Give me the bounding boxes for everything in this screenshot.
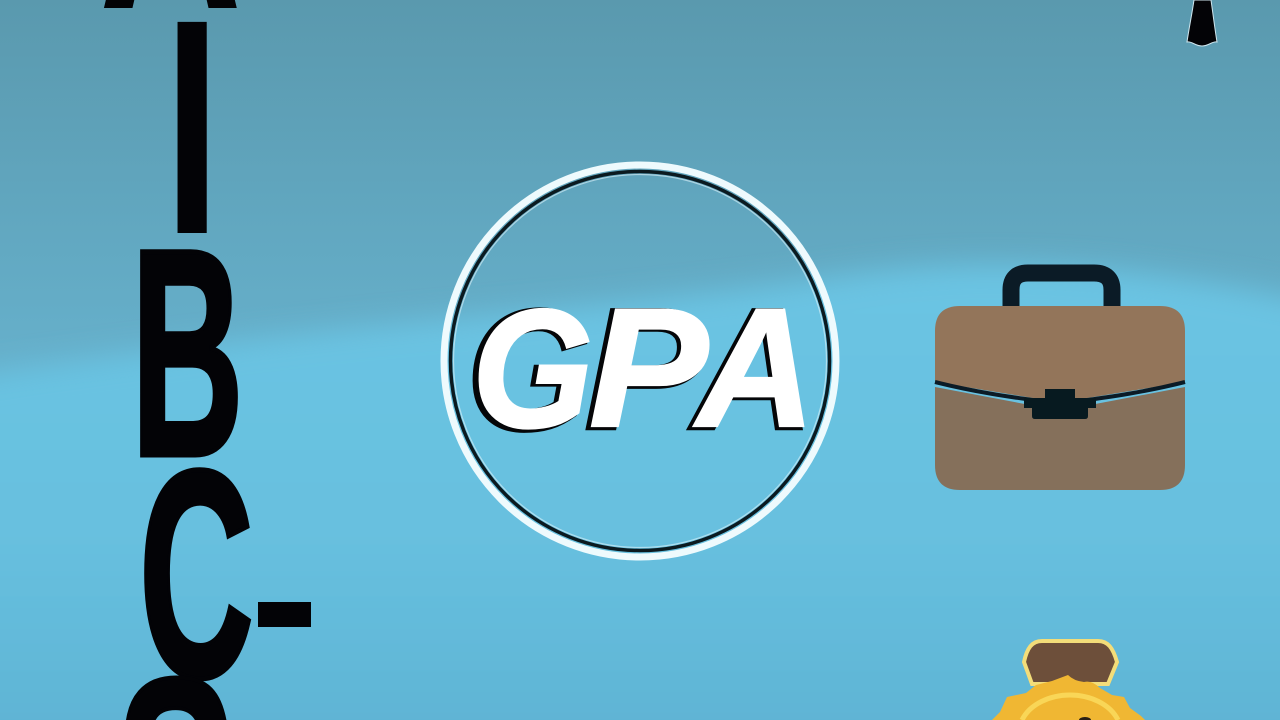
GPA badge <box>444 165 836 557</box>
icon: medal (cropped at bottom) <box>992 641 1145 720</box>
medal ribbon loop <box>1024 641 1117 684</box>
letter G shadow: G <box>467 274 590 465</box>
medal centre mark <box>1079 717 1091 720</box>
icon: graduation tassel <box>1187 0 1217 46</box>
medal inner ring <box>1022 695 1118 720</box>
letter grade column <box>99 0 311 720</box>
badge outer white ring <box>444 165 836 557</box>
briefcase handle <box>1011 273 1112 308</box>
letter A shadow: A <box>689 273 812 465</box>
briefcase seam <box>935 382 1185 401</box>
briefcase lower body <box>935 387 1185 490</box>
grade letter C with minus <box>139 409 311 720</box>
medal seal <box>992 675 1145 720</box>
grade letter B: B <box>131 189 244 519</box>
icon: briefcase <box>935 273 1185 490</box>
letter A: A <box>693 273 815 463</box>
letter G: G <box>472 275 593 463</box>
briefcase upper body <box>935 306 1185 400</box>
badge inner dark ring <box>450 172 830 550</box>
letter P shadow: P <box>585 274 706 465</box>
briefcase clasp <box>1024 389 1096 419</box>
letter P: P <box>589 273 709 462</box>
GPA heading <box>467 273 815 465</box>
badge thin inner light ring <box>454 174 826 548</box>
